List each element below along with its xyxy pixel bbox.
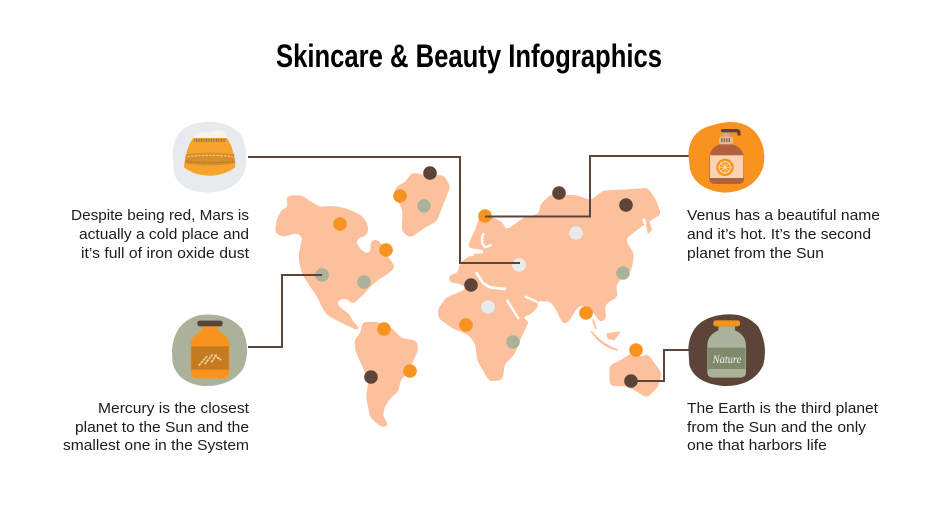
title: Skincare & Beauty Infographics xyxy=(276,38,662,74)
connector: Mercury xyxy=(248,275,322,347)
text: Mercury xyxy=(63,400,250,454)
dots on the map xyxy=(315,166,643,388)
text: Earth: The Earth is the third planet xyxy=(687,400,879,417)
icon: Nature bottle: Nature xyxy=(712,352,742,366)
text: Venus xyxy=(687,207,880,262)
map: main landmasses xyxy=(277,175,659,425)
connector: Mars xyxy=(248,157,520,263)
text: Mercury: planet to the Sun and the xyxy=(75,419,249,436)
map: seas and islands xyxy=(453,220,651,350)
text: Earth: one that harbors life xyxy=(687,437,827,454)
text: Earth: from the Sun and the only xyxy=(687,419,867,436)
text: Mars: it’s full of iron oxide dust xyxy=(81,245,250,262)
icon: orange pump bottle xyxy=(688,122,764,193)
text: Earth xyxy=(687,400,879,454)
connector: Venus xyxy=(485,156,690,216)
text: Mars: Despite being red, Mars is xyxy=(71,207,249,224)
text: Venus: Venus has a beautiful name xyxy=(687,207,880,224)
text: Mars xyxy=(71,207,250,262)
text: Venus: planet from the Sun xyxy=(687,245,824,262)
world map xyxy=(277,175,659,425)
text: Venus: and it’s hot. It’s the second xyxy=(687,226,871,243)
connector: Earth xyxy=(631,350,690,381)
icon: cream jar xyxy=(173,122,246,193)
map: Eurasia, Africa and Australia xyxy=(440,190,659,395)
text: Mars: actually a cold place and xyxy=(79,226,249,243)
icon: Nature bottle xyxy=(688,314,765,386)
text: Mercury: smallest one in the System xyxy=(63,437,249,454)
text: Mercury: Mercury is the closest xyxy=(98,400,250,417)
map: Americas and Greenland xyxy=(277,175,448,425)
icon: orange jar with wheat xyxy=(172,314,247,386)
